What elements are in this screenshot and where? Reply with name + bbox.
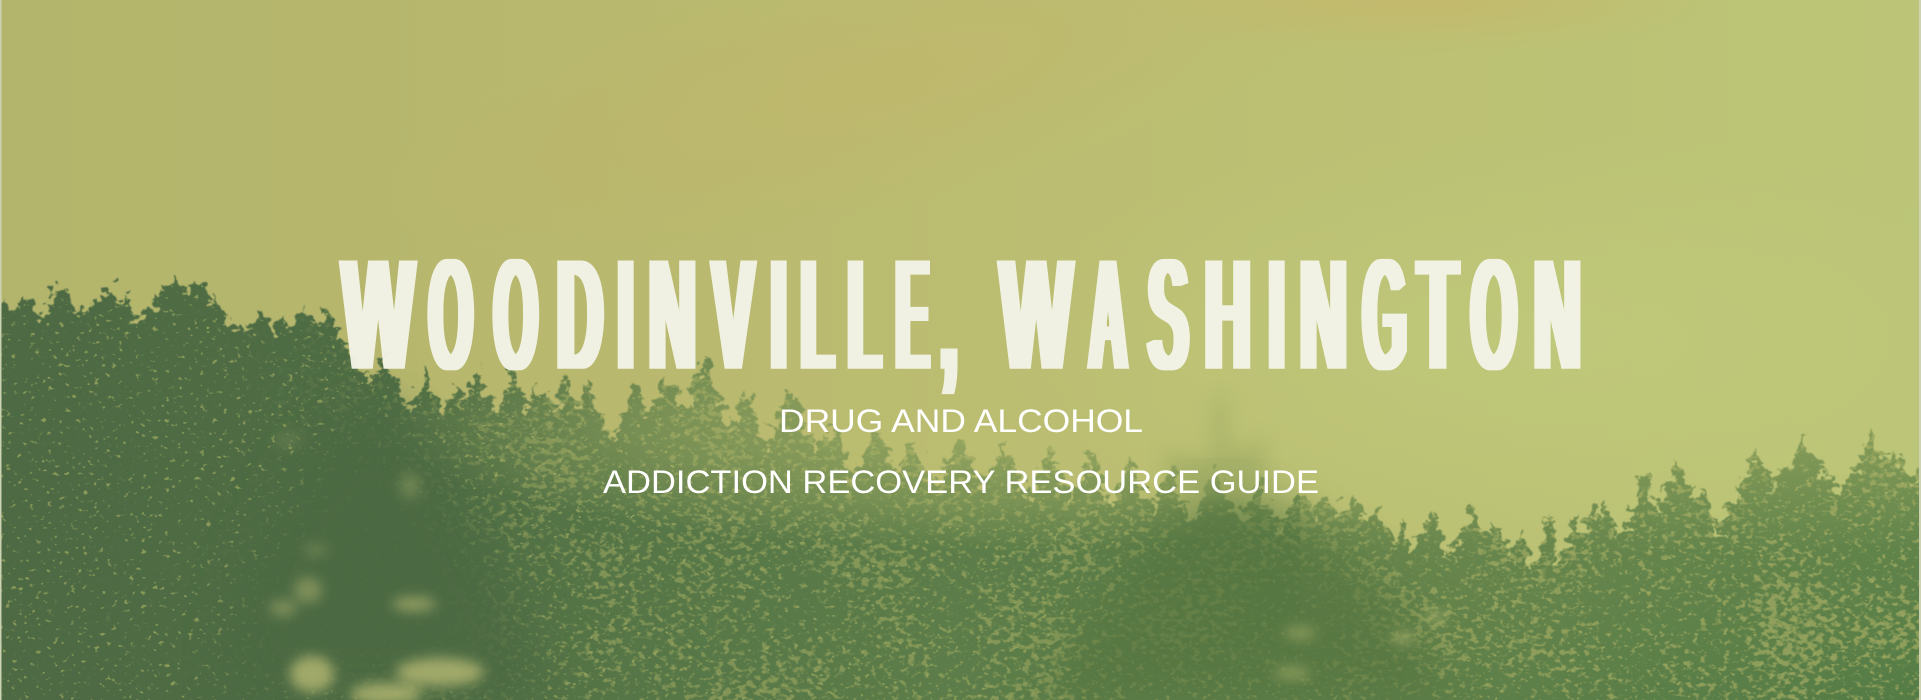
title: Woodinville, Washington: A xyxy=(1089,223,1127,406)
title: Woodinville, Washington: N xyxy=(649,223,695,406)
title: Woodinville, Washington: L xyxy=(848,223,881,406)
title: Woodinville, Washington: I xyxy=(771,223,787,406)
title: Woodinville, Washington: W xyxy=(342,223,414,406)
blurred foreground tree, left xyxy=(215,400,540,700)
snow speckles on trees xyxy=(2,278,1919,700)
title: Woodinville, Washington: L xyxy=(801,223,834,406)
forest silhouette xyxy=(2,274,1919,700)
title: Woodinville, Washington: O xyxy=(494,223,537,406)
title: Woodinville, Washington: G xyxy=(1363,223,1406,406)
title: Woodinville, Washington: N xyxy=(1534,223,1580,406)
subtitle line 2: ADDICTION RECOVERY RESOURCE GUIDE xyxy=(603,464,1319,500)
subtitle xyxy=(603,403,1319,500)
atmospheric haze over the distant trees xyxy=(440,356,1919,586)
title: Woodinville, Washington: H xyxy=(1205,223,1250,406)
title: Woodinville, Washington: O xyxy=(1471,223,1516,406)
title: Woodinville, Washington: D xyxy=(557,223,603,406)
title: Woodinville, Washington: N xyxy=(1300,223,1346,406)
title: Woodinville, Washington: E xyxy=(896,223,929,406)
title: Woodinville, Washington: I xyxy=(618,223,634,406)
blurred foreground tree, right xyxy=(1040,392,1450,700)
title: Woodinville, Washington: W xyxy=(1000,223,1072,406)
title: Woodinville, Washington: V xyxy=(712,223,754,406)
subtitle line 1: DRUG AND ALCOHOL xyxy=(779,403,1143,439)
title: Woodinville, Washington: S xyxy=(1148,223,1188,406)
title: Woodinville, Washington: O xyxy=(429,223,472,406)
title: Woodinville, Washington: T xyxy=(1418,223,1457,406)
title: Woodinville, Washington: , xyxy=(940,223,958,406)
title: Woodinville, Washington: I xyxy=(1269,223,1285,406)
